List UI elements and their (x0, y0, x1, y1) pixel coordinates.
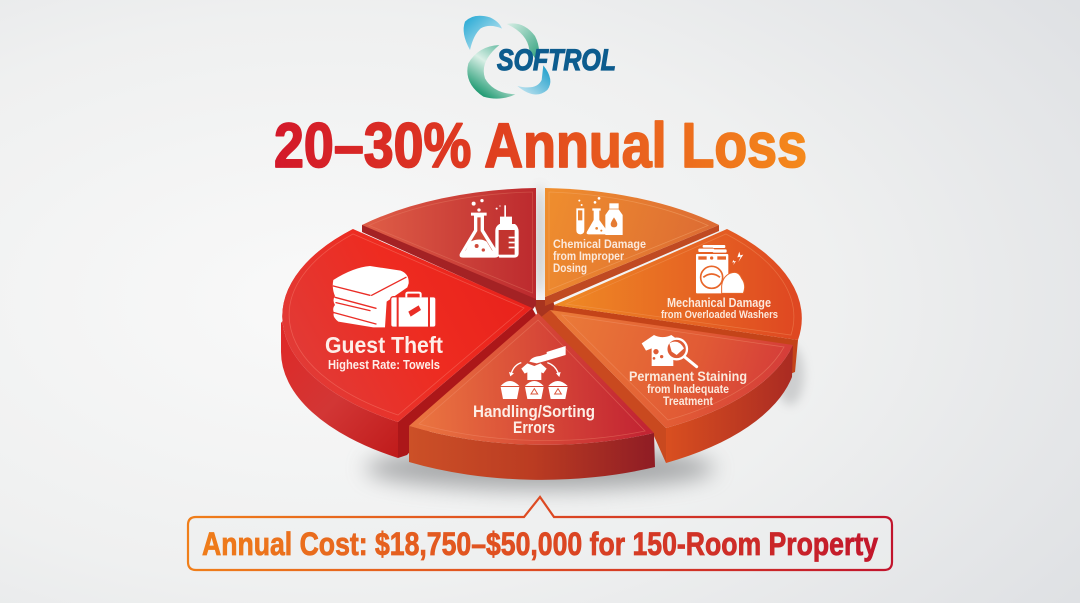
title: 20–30% Annual Loss (274, 111, 807, 181)
icon: stained shirt and magnifier (642, 335, 697, 367)
slice: chemical damage from improper dosing (545, 188, 719, 306)
label: permanent staining: Permanent Staining (629, 369, 747, 384)
label: mechanical damage (661, 295, 778, 321)
label: chemical damage: from Improper (553, 251, 624, 263)
slice: chemical damage, unlabelled icon (362, 188, 536, 309)
label: handling/sorting errors: Handling/Sorting (473, 403, 595, 421)
pie shadow (365, 185, 804, 490)
slice: permanent staining from inadequate treatment (540, 310, 793, 463)
pie chart (281, 188, 802, 480)
slice: mechanical damage from overloaded washers (553, 229, 802, 374)
label: guest theft: Highest Rate: Towels (328, 358, 440, 372)
label: chemical damage: Chemical Damage (553, 237, 646, 251)
label: chemical damage (553, 237, 646, 275)
callout: annual cost: Annual Cost: $18,750–$50,000 for 150-Room Property (202, 526, 878, 562)
icon: flask and bottle (460, 199, 519, 258)
icon: towels and suitcase (333, 266, 436, 327)
label: permanent staining (629, 369, 747, 408)
icon: hand sorting shirt into bins (501, 346, 568, 399)
icon: washing machine (696, 245, 745, 293)
label: handling/sorting errors (473, 403, 595, 437)
label: chemical damage: Dosing (553, 263, 587, 275)
logo: Softrol (464, 16, 616, 99)
logo: Softrol: SOFTROL (497, 44, 616, 77)
label: guest theft (325, 332, 443, 372)
icon: lab glassware (576, 197, 623, 235)
callout: annual cost (188, 497, 892, 570)
label: permanent staining: Treatment (663, 396, 713, 408)
label: guest theft: Guest Theft (325, 332, 443, 358)
label: permanent staining: from Inadequate (647, 384, 729, 396)
label: handling/sorting errors: Errors (513, 419, 555, 437)
label: mechanical damage: from Overloaded Washers (661, 309, 778, 321)
slice: guest theft (281, 229, 536, 458)
pie hub: dark centre behind slice tips (533, 300, 558, 322)
label: mechanical damage: Mechanical Damage (667, 295, 771, 310)
slice: handling/sorting errors (409, 313, 655, 480)
